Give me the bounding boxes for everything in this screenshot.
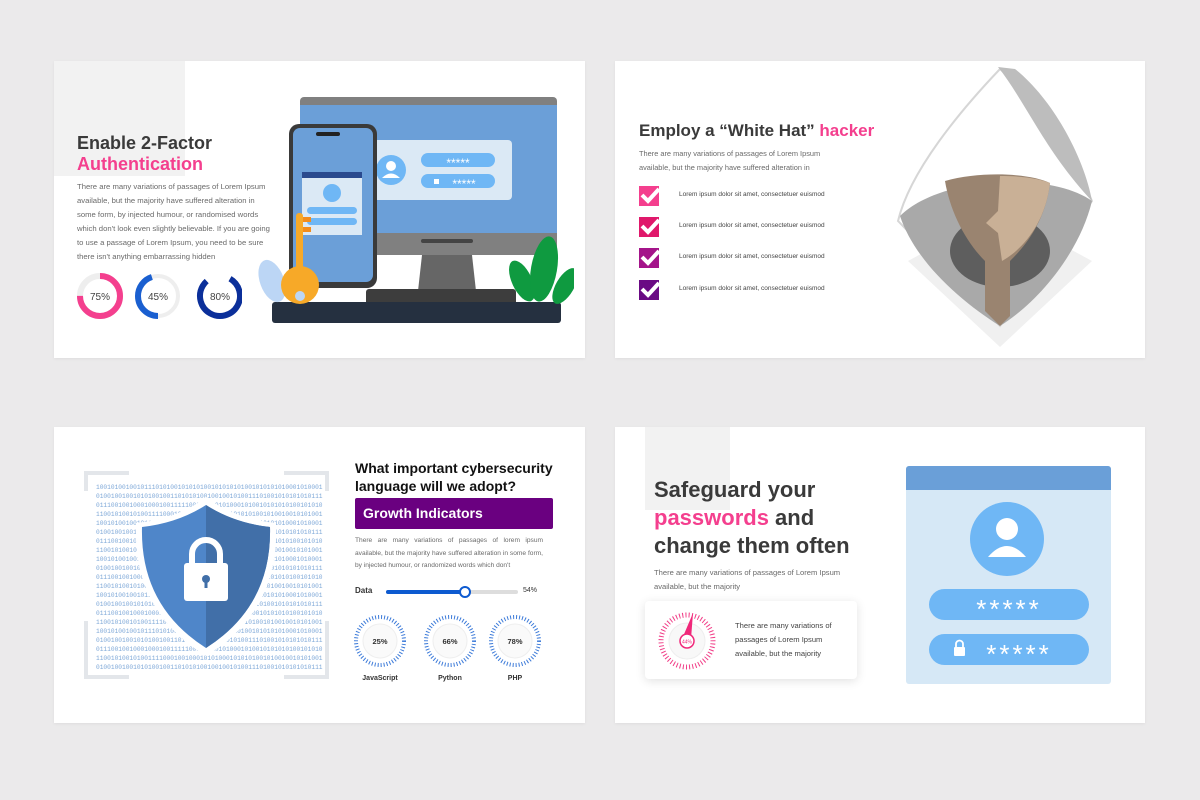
icon: leaf bbox=[253, 256, 291, 306]
illustration: devices bbox=[258, 97, 574, 323]
item 4 bbox=[639, 280, 825, 300]
item 4: Lorem ipsum dolor sit amet, consectetuer euismod bbox=[679, 285, 825, 292]
gauge: PHP 78%: PHP bbox=[508, 675, 523, 682]
gauge: JavaScript 25%: JavaScript bbox=[362, 675, 398, 682]
gauge: Python 66%: Python bbox=[438, 675, 462, 682]
donut 45%: 45% bbox=[148, 292, 168, 303]
card: gauge 44% bbox=[645, 601, 857, 679]
panel: white hat hacker bbox=[615, 61, 1145, 358]
panel: 2-factor authentication bbox=[54, 61, 585, 358]
item 3 bbox=[639, 248, 825, 268]
item 1: Lorem ipsum dolor sit amet, consectetuer euismod bbox=[679, 191, 825, 198]
gauge: Python 66% bbox=[426, 617, 474, 682]
item 3: Lorem ipsum dolor sit amet, consectetuer euismod bbox=[679, 253, 825, 260]
illustration: binary shield: 0100100100101010010011010101001001001010011101001010101010111 bbox=[96, 601, 323, 608]
heading: What important cybersecurity bbox=[355, 460, 553, 476]
body text: There are many variations of passages of Lorem Ipsum available, but the majority have suffered alteration in some form, by injected humour, or randomised words which don't look even slightly believable. If you are going to use a passage of Lorem Ipsum, you need to be sure there isn't anything embarrassing hidden bbox=[77, 182, 270, 261]
illustration: binary shield: 1100101001010011110001001000101010001010101001010010010101001 bbox=[96, 511, 323, 518]
illustration: login window: ***** bbox=[986, 639, 1052, 669]
gauge: Python 66%: 66% bbox=[442, 637, 458, 646]
illustration: binary shield: 1001010010010111010100101010100101010101001010101010001010001 bbox=[96, 484, 323, 491]
gauge: PHP 78%: 78% bbox=[507, 637, 523, 646]
illustration: binary shield: 1001010010010111010100101010100101010101001010101010001010001 bbox=[96, 628, 323, 635]
gauge: 44% bbox=[682, 640, 693, 646]
gauge: JavaScript 25% bbox=[356, 617, 404, 682]
illustration: login window bbox=[906, 466, 1111, 684]
icon: key bbox=[281, 213, 319, 304]
item 2: Lorem ipsum dolor sit amet, consectetuer euismod bbox=[679, 222, 825, 229]
illustration: binary shield: 0100100100101010010011010101001001001010011101001010101010111 bbox=[96, 637, 323, 644]
illustration: binary shield: 0100100100101010010011010101001001001010011101001010101010111 bbox=[96, 664, 323, 671]
heading bbox=[355, 460, 553, 494]
icon: plant bbox=[504, 234, 583, 308]
banner: growth indicators: Growth Indicators bbox=[363, 505, 483, 521]
heading: Safeguard your bbox=[654, 477, 815, 502]
illustration: binary shield: 0100100100101010010011010101001001001010011101001010101010111 bbox=[96, 493, 323, 500]
checklist bbox=[639, 186, 825, 300]
donut charts bbox=[77, 273, 242, 319]
heading bbox=[77, 133, 212, 174]
illustration: binary shield: 1100101001010011110001001000101010001010101001010010010101001 bbox=[96, 619, 323, 626]
body text: There are many variations of passages of Lorem Ipsum available, but the majority bbox=[654, 568, 840, 591]
illustration: binary shield: 0111001001000100010011111000100101010001010010101010100101010 bbox=[96, 610, 323, 617]
body text: There are many variations of passages of lorem ipsum available, but the majority have suffered alteration in some form, by injected humour, or randomized words which don't bbox=[355, 537, 543, 569]
phone bbox=[289, 124, 377, 288]
illustration: binary shield: 1001010010010111010100101010100101010101001010101010001010001 bbox=[96, 520, 323, 527]
illustration: hooded hacker bbox=[897, 67, 1093, 346]
item 2 bbox=[639, 217, 825, 237]
illustration: binary shield: 1100101001010011110001001000101010001010101001010010010101001 bbox=[96, 655, 323, 662]
body text: There are many variations of passages of Lorem Ipsum available, but the majority have suffered alteration in bbox=[639, 149, 820, 172]
illustration: binary shield: 1001010010010111010100101010100101010101001010101010001010001 bbox=[96, 556, 323, 563]
heading: Authentication bbox=[77, 154, 203, 174]
donut 75% bbox=[80, 276, 120, 316]
item 1 bbox=[639, 186, 825, 206]
monitor: ***** bbox=[452, 177, 476, 191]
gauges bbox=[354, 615, 541, 682]
heading: Enable 2-Factor bbox=[77, 133, 212, 153]
panel: cybersecurity language bbox=[54, 427, 585, 723]
donut 45% bbox=[138, 276, 178, 316]
illustration: login window: ***** bbox=[976, 594, 1042, 624]
illustration: binary shield: 1100101001010011110001001000101010001010101001010010010101001 bbox=[96, 547, 323, 554]
decorative grey block bbox=[645, 427, 730, 510]
illustration: binary shield: 0111001001000100010011111000100101010001010010101010100101010 bbox=[96, 574, 323, 581]
heading: passwords and bbox=[654, 505, 814, 530]
monitor bbox=[300, 97, 557, 307]
gauge: PHP 78% bbox=[491, 617, 539, 682]
decorative grey block bbox=[54, 61, 185, 176]
illustration: binary shield: 0111001001000100010011111000100101010001010010101010100101010 bbox=[96, 538, 323, 545]
illustration: binary shield: 0100100100101010010011010101001001001010011101001010101010111 bbox=[96, 529, 323, 536]
illustration: binary shield: 0100100100101010010011010101001001001010011101001010101010111 bbox=[96, 565, 323, 572]
desk bbox=[272, 302, 561, 323]
illustration: binary shield: 1100101001010011110001001000101010001010101001010010010101001 bbox=[96, 583, 323, 590]
banner: growth indicators bbox=[355, 498, 553, 529]
slider: data 54% bbox=[355, 586, 537, 598]
gauge: JavaScript 25%: 25% bbox=[372, 637, 388, 646]
illustration: binary shield: 0111001001000100010011111000100101010001010010101010100101010 bbox=[96, 646, 323, 653]
heading bbox=[654, 477, 850, 558]
illustration: binary shield: 1001010010010111010100101010100101010101001010101010001010001 bbox=[96, 592, 323, 599]
card text: There are many variations of passages of Lorem Ipsum available, but the majority bbox=[735, 621, 832, 658]
heading: Employ a “White Hat” hacker bbox=[639, 121, 874, 140]
panel: safeguard passwords bbox=[615, 427, 1145, 723]
heading: change them often bbox=[654, 533, 850, 558]
slider: data 54%: 54% bbox=[523, 587, 537, 594]
donut 75%: 75% bbox=[90, 292, 110, 303]
monitor: ***** bbox=[446, 156, 470, 170]
donut 80%: 80% bbox=[210, 292, 230, 303]
gauge bbox=[658, 612, 716, 670]
illustration: binary shield bbox=[84, 471, 329, 679]
heading: language will we adopt? bbox=[355, 478, 516, 494]
slider: data 54%: Data bbox=[355, 586, 372, 595]
donut 80% bbox=[193, 269, 247, 323]
illustration: binary shield: 0111001001000100010011111000100101010001010010101010100101010 bbox=[96, 502, 323, 509]
